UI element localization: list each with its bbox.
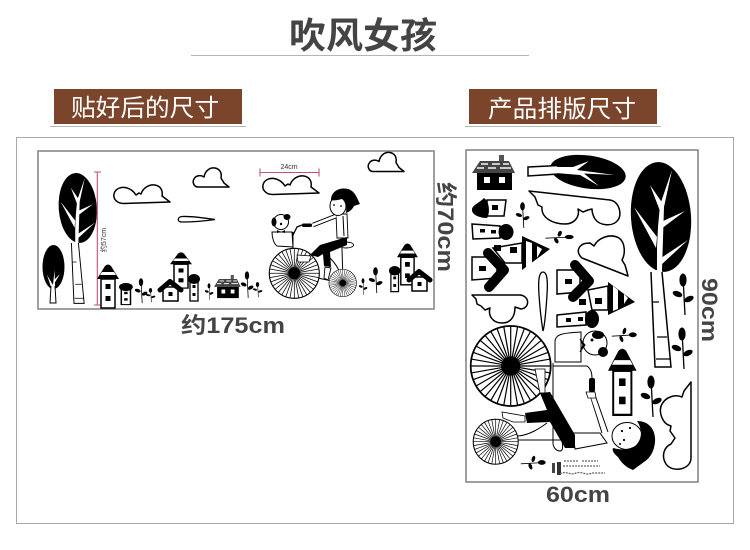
height ruler 57cm: 约57cm	[99, 228, 108, 252]
cloud outlines	[472, 191, 691, 469]
panel: installed wall scene	[38, 151, 434, 309]
small sideways tower	[472, 224, 514, 240]
vertical wing shape	[539, 272, 547, 331]
upright tower	[608, 349, 637, 415]
title: 吹风女孩	[289, 15, 437, 56]
heading: installed size	[50, 89, 246, 127]
clouds	[114, 152, 404, 204]
sideways tower and house 2	[557, 265, 635, 315]
heading: layout size: 产品排版尺寸	[488, 96, 636, 123]
roof house	[472, 155, 515, 190]
sideways girl, bicycle and dog	[471, 326, 655, 470]
dimension: height 70cm: 约70cm	[433, 182, 458, 272]
small tree	[42, 245, 64, 303]
dimension: height 90cm: 90cm	[697, 278, 722, 342]
sideways tower and house 1	[472, 236, 550, 287]
girl on bicycle with dog	[269, 188, 360, 298]
small maker mark	[552, 461, 605, 475]
large tree	[56, 172, 99, 303]
small house	[472, 198, 506, 218]
large tree	[627, 160, 695, 367]
dimension: width 175cm: 约175cm	[181, 313, 285, 338]
width ruler 24cm: 24cm	[280, 164, 298, 171]
wing shape	[178, 216, 215, 222]
heading: installed size: 贴好后的尺寸	[71, 95, 219, 122]
village right	[359, 243, 430, 295]
small sideways tower 2	[557, 310, 599, 328]
dimension: width 60cm: 60cm	[546, 482, 610, 507]
leaf sprigs	[515, 202, 695, 470]
horizontal tree	[528, 150, 628, 194]
outer frame	[16, 138, 734, 524]
height ruler 57cm	[94, 172, 108, 305]
village left	[97, 252, 263, 308]
panel: sticker sheet layout	[466, 150, 698, 482]
heading: layout size	[465, 89, 661, 127]
width ruler 24cm	[260, 164, 319, 176]
